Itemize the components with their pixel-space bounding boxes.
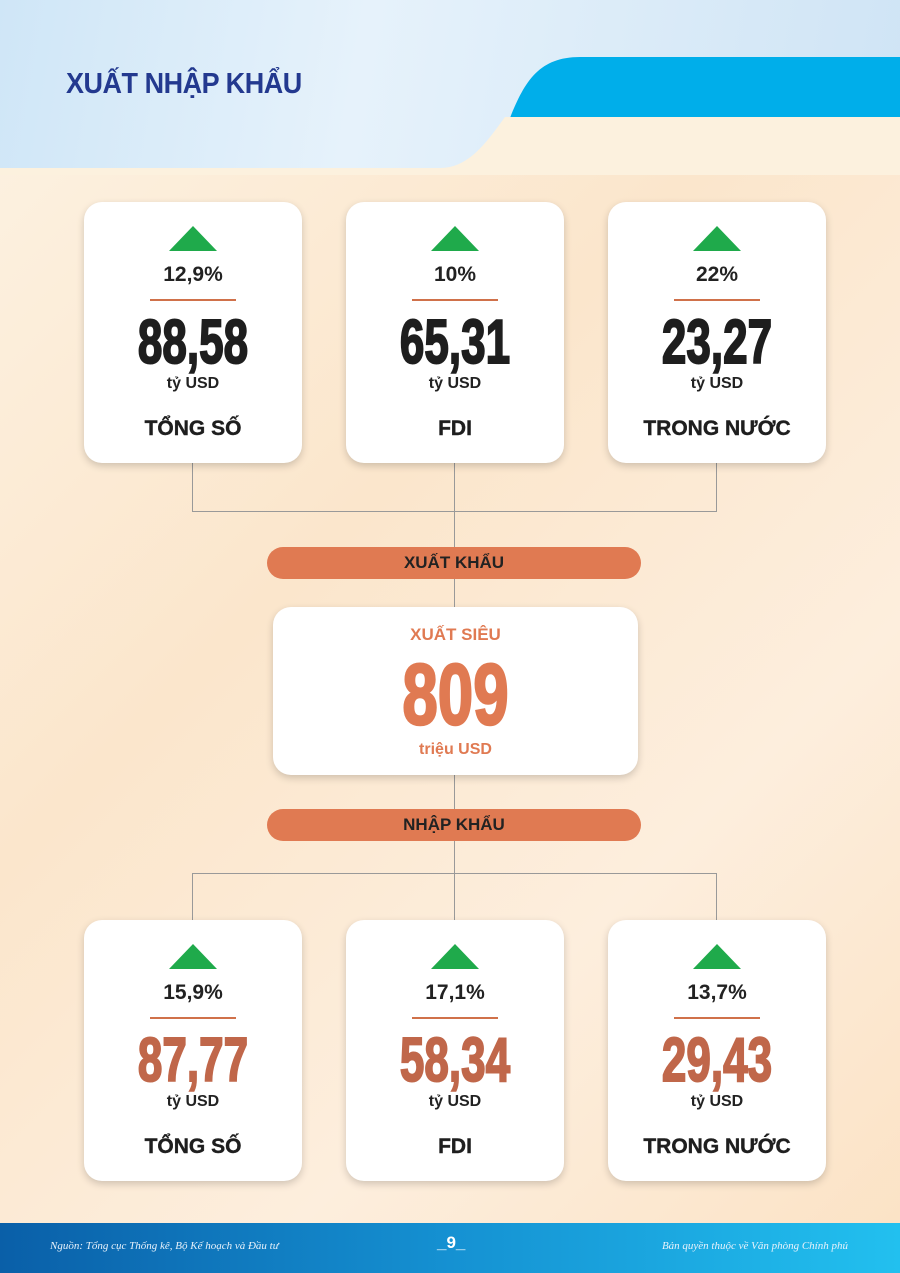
card: export total: 12,9% — [163, 263, 223, 286]
card: trade surplus: XUẤT SIÊU — [410, 625, 501, 644]
card: import domestic: tỷ USD — [691, 1093, 743, 1110]
card: export total: TỔNG SỐ — [145, 417, 241, 440]
card: export total: 88,58 — [138, 308, 248, 377]
card: export FDI: tỷ USD — [429, 375, 481, 392]
pill: import — [267, 809, 641, 841]
card: trade surplus — [273, 607, 638, 775]
card: export domestic — [608, 202, 826, 463]
card: import domestic: 13,7% — [687, 981, 747, 1004]
page number: _9_ — [437, 1233, 465, 1252]
footer source: Nguồn: Tổng cục Thống kê, Bộ Kế hoạch và Đầu tư — [50, 1240, 279, 1252]
card: import total: 87,77 — [138, 1026, 248, 1095]
card: export domestic: 22% — [696, 263, 738, 286]
card: export total — [84, 202, 302, 463]
card: import domestic: TRONG NƯỚC — [643, 1135, 791, 1158]
card: trade surplus: 809 — [402, 647, 509, 743]
footer copyright: Bản quyền thuộc về Văn phòng Chính phủ — [662, 1240, 848, 1252]
card: import FDI: tỷ USD — [429, 1093, 481, 1110]
footer — [0, 1223, 900, 1273]
card: import total — [84, 920, 302, 1181]
pill: export: XUẤT KHẨU — [404, 553, 504, 572]
card: import FDI: 17,1% — [425, 981, 485, 1004]
card: trade surplus: triệu USD — [419, 741, 492, 758]
card: export FDI — [346, 202, 564, 463]
card: import domestic: 29,43 — [662, 1026, 772, 1095]
header background — [0, 0, 900, 170]
header blue band — [0, 57, 900, 175]
card: export total: tỷ USD — [167, 375, 219, 392]
pill: import: NHẬP KHẨU — [403, 815, 505, 834]
card: import total: 15,9% — [163, 981, 223, 1004]
card: import FDI — [346, 920, 564, 1181]
card: import FDI: FDI — [438, 1135, 472, 1158]
title: XUẤT NHẬP KHẨU — [66, 68, 302, 100]
card: export FDI: 65,31 — [400, 308, 510, 377]
card: export domestic: 23,27 — [662, 308, 772, 377]
card: import total: tỷ USD — [167, 1093, 219, 1110]
card: export domestic: TRONG NƯỚC — [643, 417, 791, 440]
card: import total: TỔNG SỐ — [145, 1135, 241, 1158]
card: export domestic: tỷ USD — [691, 375, 743, 392]
card: export FDI: FDI — [438, 417, 472, 440]
card: export FDI: 10% — [434, 263, 476, 286]
pill: export — [267, 547, 641, 579]
card: import domestic — [608, 920, 826, 1181]
card: import FDI: 58,34 — [400, 1026, 510, 1095]
